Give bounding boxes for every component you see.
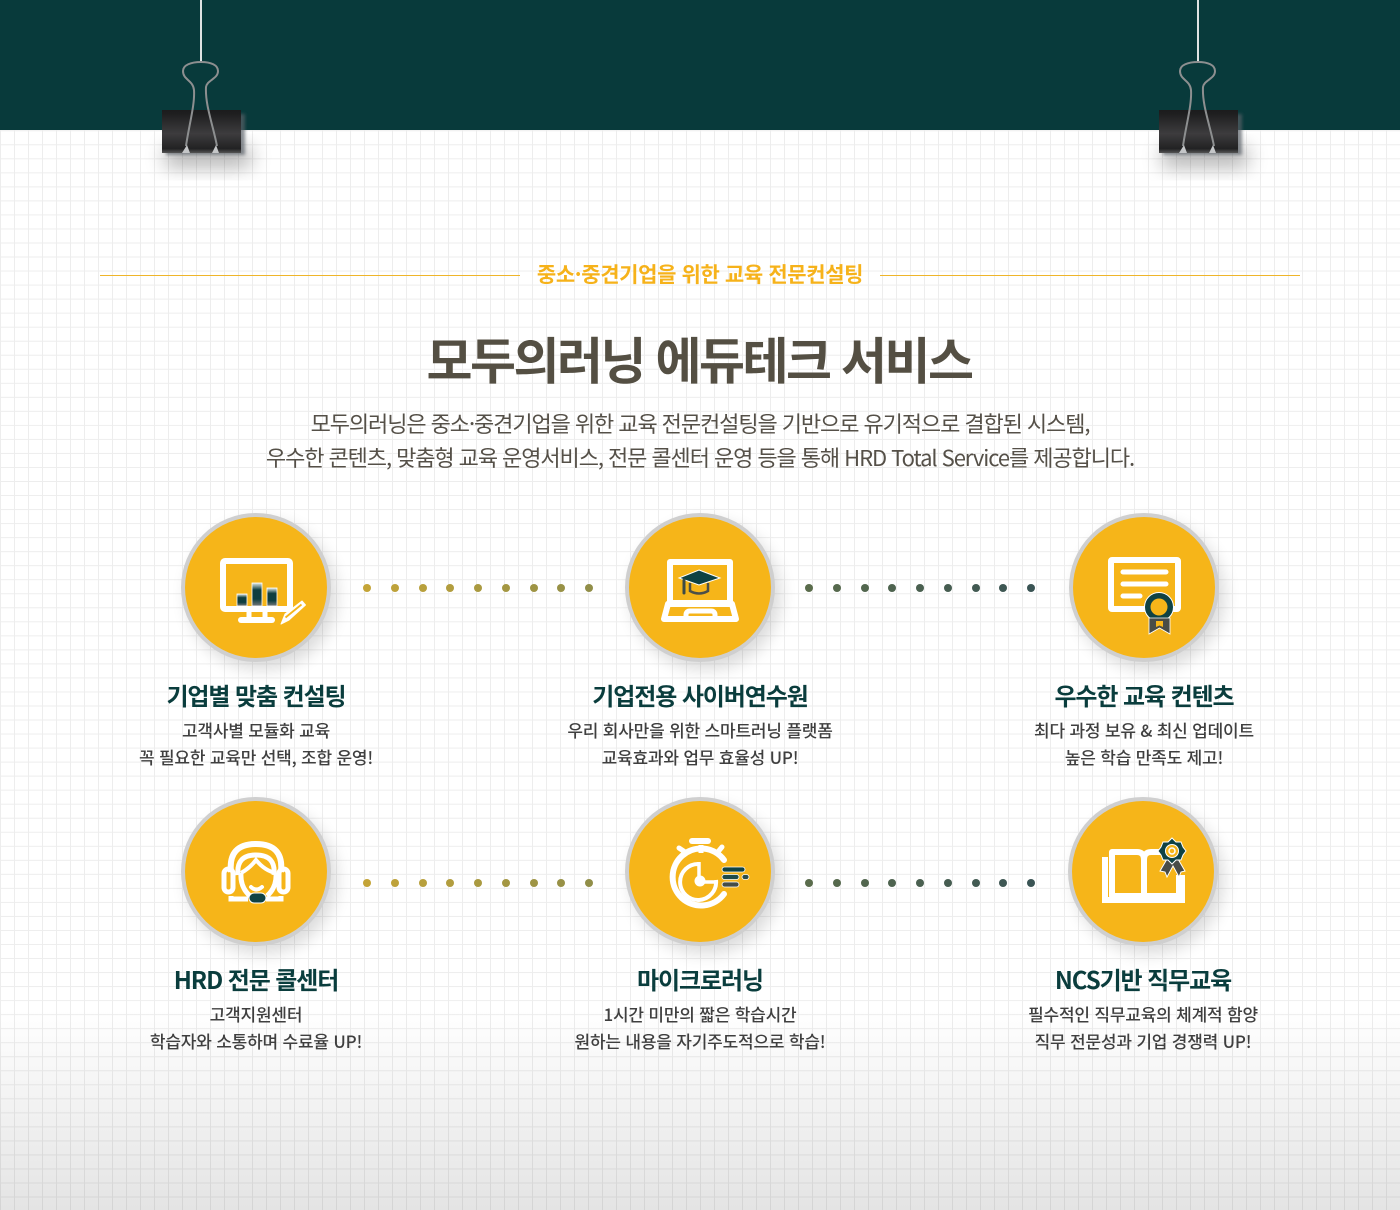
service: 마이크로러닝 [575,797,825,1053]
heading: 기업전용 사이버연수원 [592,677,808,712]
text [1034,717,1254,769]
icon: headset agent [222,841,290,904]
text [575,1001,825,1053]
text: 최다 과정 보유 & 최신 업데이트 [1034,717,1254,742]
service: 기업전용 사이버연수원 [567,513,833,769]
text: 직무 전문성과 기업 경쟁력 UP! [1035,1028,1251,1053]
icon: stopwatch [670,838,750,908]
icon circle [625,797,775,946]
text [150,1001,362,1053]
bottom gradient [0,1010,1400,1210]
text: 학습자와 소통하며 수료율 UP! [150,1028,362,1053]
text: 필수적인 직무교육의 체계적 함양 [1028,1001,1258,1026]
text [567,717,833,769]
icon circle [1069,513,1219,662]
heading: NCS기반 직무교육 [1055,961,1231,996]
subtitle: 중소·중견기업을 위한 교육 전문컨설팅 [537,259,863,289]
text: 원하는 내용을 자기주도적으로 학습! [575,1028,825,1053]
icon: laptop with cap [661,559,739,622]
icon: book with badge [1102,837,1186,903]
service: 기업별 맞춤 컨설팅 [139,513,373,769]
icon circle [181,513,331,662]
text: 꼭 필요한 교육만 선택, 조합 운영! [139,744,373,769]
right binder clip [1152,0,1258,178]
dots: row 2 right [805,879,1035,887]
icon: certificate [1108,557,1181,635]
icon: monitor with chart [220,558,306,624]
description: 모두의러닝은 중소·중견기업을 위한 교육 전문컨설팅을 기반으로 유기적으로 결합된 시스템, [311,407,1089,439]
header band [0,0,1400,130]
description [266,407,1134,473]
text: 1시간 미만의 짧은 학습시간 [603,1001,796,1026]
dots: row 1 right [805,584,1035,592]
text: 높은 학습 만족도 제고! [1065,744,1223,769]
right rule [880,275,1300,276]
left rule [100,275,520,276]
icon circle [181,797,331,946]
text: 고객지원센터 [210,1001,302,1026]
heading: 마이크로러닝 [637,961,763,996]
service: NCS기반 직무교육 [1028,797,1258,1053]
text [1028,1001,1258,1053]
title: 모두의러닝 에듀테크 서비스 [426,322,972,394]
text: 고객사별 모듈화 교육 [182,717,330,742]
service: HRD 전문 콜센터 [150,797,362,1053]
description: 우수한 콘텐츠, 맞춤형 교육 운영서비스, 전문 콜센터 운영 등을 통해 HRD Total Service를 제공합니다. [266,441,1134,473]
text [139,717,373,769]
heading: HRD 전문 콜센터 [174,961,338,996]
icon circle [625,513,775,662]
text: 우리 회사만을 위한 스마트러닝 플랫폼 [567,717,833,742]
text: 교육효과와 업무 효율성 UP! [602,744,798,769]
service: 우수한 교육 컨텐츠 [1034,513,1254,769]
left binder clip [156,0,260,178]
dots: row 1 left [363,584,593,592]
icon circle [1068,797,1218,946]
heading: 우수한 교육 컨텐츠 [1054,677,1234,712]
heading: 기업별 맞춤 컨설팅 [166,677,346,712]
dots: row 2 left [363,879,593,887]
